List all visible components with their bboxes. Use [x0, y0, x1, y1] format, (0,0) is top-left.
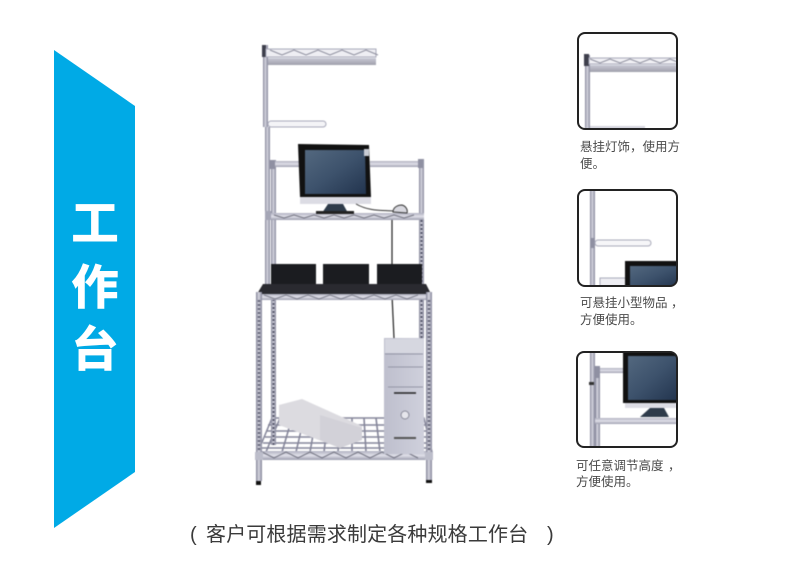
mouse and cable — [356, 204, 407, 338]
caption: height: 可任意调节高度 — [576, 458, 664, 473]
table wire rail — [258, 294, 430, 300]
white box — [279, 399, 362, 448]
panel: lamp detail — [578, 33, 680, 129]
caption: hook: 方便使用。 — [580, 312, 643, 327]
footer note: ) — [547, 524, 554, 546]
upper rear rail — [270, 159, 423, 169]
caption: height: 方便使用。 — [576, 474, 639, 489]
computer tower — [384, 338, 424, 454]
black storage bins — [271, 264, 422, 285]
caption: hook: ， — [671, 296, 684, 310]
monitor — [298, 144, 371, 214]
panel: height detail — [577, 351, 678, 447]
footer note: ( — [190, 524, 197, 546]
caption: lamp: 悬挂灯饰，使用方 — [580, 139, 680, 154]
front legs — [255, 292, 433, 485]
title — [72, 197, 118, 376]
tall left post — [263, 45, 268, 127]
blue title banner — [54, 50, 135, 528]
caption: hook: 可悬挂小型物品 — [580, 296, 668, 310]
top lamp shelf — [266, 49, 378, 65]
black table top — [257, 284, 431, 294]
caption: height: ， — [668, 459, 681, 473]
title: 工 — [72, 197, 118, 250]
middle shelf — [265, 211, 424, 220]
workbench illustration — [255, 45, 433, 485]
bottom wire shelf — [258, 418, 432, 460]
title: 作 — [72, 261, 118, 314]
panel: hook detail — [578, 190, 678, 287]
rear posts — [271, 159, 424, 445]
footer note: 客户可根据需求制定各种规格工作台 — [206, 523, 528, 546]
caption: lamp: 便。 — [580, 157, 605, 171]
small hook — [268, 121, 326, 127]
title: 台 — [72, 323, 118, 376]
